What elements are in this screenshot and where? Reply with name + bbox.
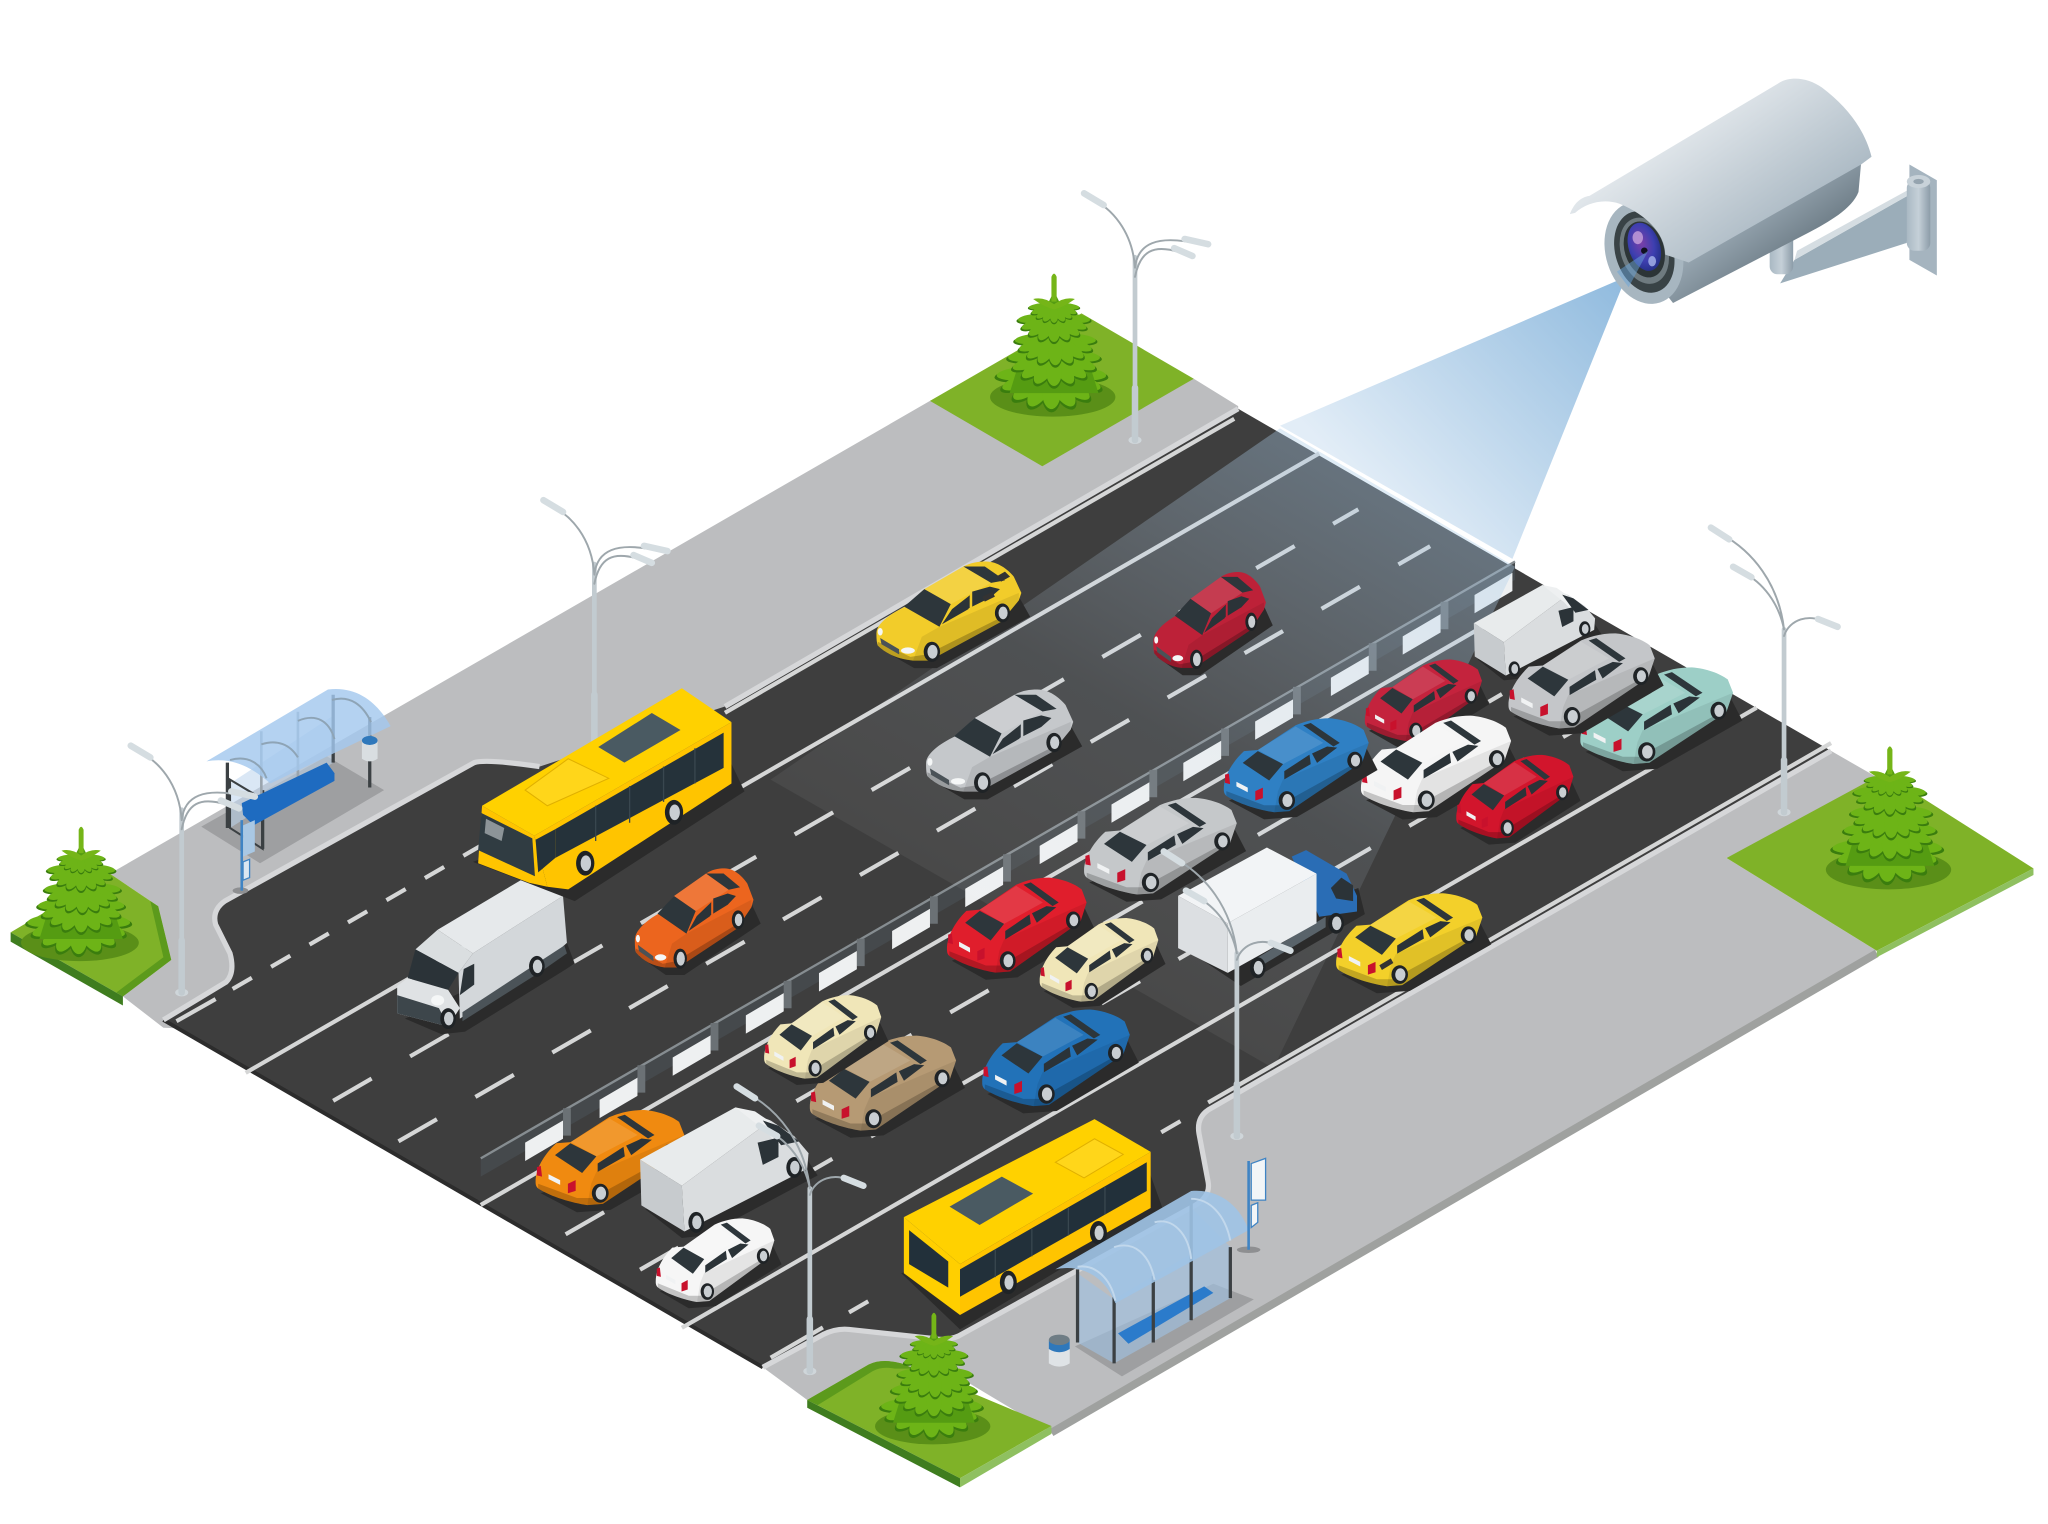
white box truck bbox=[1178, 848, 1365, 986]
grass corner: right with tree bbox=[1727, 746, 2033, 957]
taxi lower bbox=[1336, 893, 1491, 993]
bus shelter: bottom bbox=[1055, 1191, 1254, 1376]
lamp posts: upper row bbox=[131, 193, 1838, 996]
silver sedan middle bbox=[1084, 798, 1246, 902]
orange sedan bbox=[536, 1110, 693, 1212]
road lane markings bbox=[176, 419, 1831, 1358]
camera field of view on road bbox=[771, 428, 1515, 1068]
ground: upper sidewalk bbox=[110, 379, 1238, 1032]
road surface bbox=[163, 409, 1831, 1367]
bus stop sign: upper left bbox=[233, 820, 255, 894]
teal sedan lower bbox=[1580, 667, 1742, 771]
cream hatchback bottom bbox=[764, 995, 888, 1085]
silver sedan upper bbox=[926, 690, 1082, 799]
dark red hatchback lower bbox=[1365, 659, 1489, 747]
lamp post: bottom centre bbox=[1164, 851, 1290, 1140]
white van upper bbox=[397, 878, 575, 1034]
grass corner: left with tree bbox=[11, 827, 171, 1006]
camera wall bracket bbox=[1770, 165, 1937, 283]
yellow bus upper bbox=[473, 688, 745, 901]
grass corner: top with tree bbox=[930, 274, 1194, 466]
camera body bbox=[1592, 163, 1861, 314]
red car middle bbox=[947, 878, 1095, 980]
beam overlap on lens bbox=[1617, 251, 1648, 287]
white van lower bbox=[640, 1107, 818, 1238]
camera light beam bbox=[1280, 277, 1626, 559]
cream hatchback middle bbox=[1040, 918, 1166, 1008]
grass corner: bottom with tree bbox=[807, 1313, 1051, 1487]
blue sedan bottom bbox=[982, 1009, 1139, 1113]
blue sedan lower bbox=[1224, 718, 1378, 819]
ground: lower sidewalk bbox=[763, 751, 1883, 1433]
small white van lower bbox=[1474, 585, 1602, 680]
yellow bus lower bbox=[901, 1119, 1162, 1329]
median barrier bbox=[481, 562, 1515, 1177]
bus stop sign: bottom bbox=[1237, 1158, 1266, 1253]
camera hood bbox=[1570, 79, 1872, 262]
bus shelter: upper left bbox=[201, 689, 391, 863]
tan SUV bbox=[810, 1036, 965, 1138]
lamp post: bottom left bbox=[737, 1087, 863, 1375]
red hatchback upper bbox=[1153, 572, 1273, 675]
taxi upper bbox=[876, 562, 1030, 668]
silver sedan lower bbox=[1508, 633, 1664, 736]
camera lens bbox=[1622, 218, 1667, 275]
red hatchback lower bbox=[1456, 755, 1581, 845]
orange hatchback upper bbox=[635, 868, 761, 975]
white sedan lower bbox=[1361, 716, 1520, 820]
small white car bbox=[656, 1218, 782, 1308]
surveillance camera bbox=[1570, 79, 1937, 314]
trash bin bbox=[1049, 1335, 1070, 1367]
trash bin: upper shelter bbox=[362, 736, 378, 761]
